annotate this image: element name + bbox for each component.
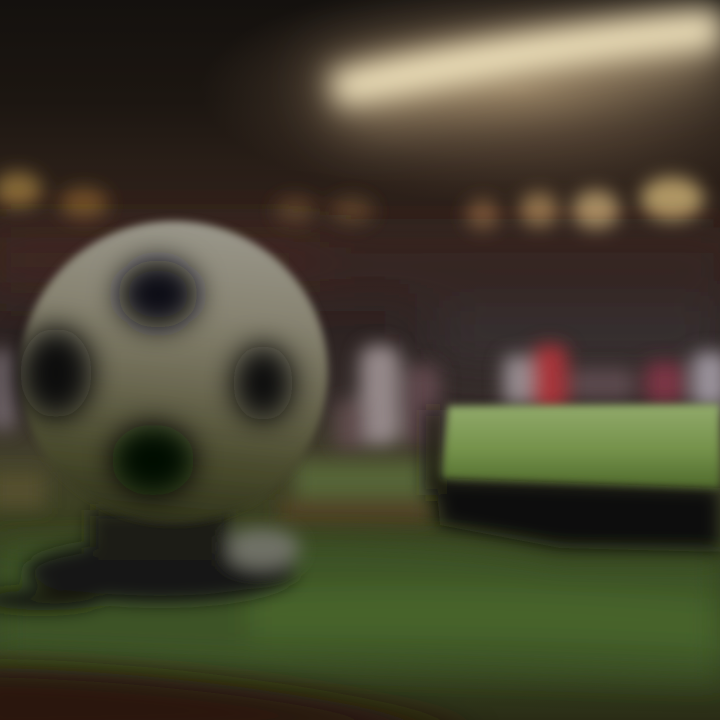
ball patches — [20, 260, 293, 496]
monitor dark base — [425, 410, 720, 552]
ball pedestal — [0, 510, 300, 610]
stand colour bands — [0, 235, 720, 350]
stadium glow under floodlight — [200, 0, 720, 205]
floodlight halo — [320, 10, 720, 125]
floodlight beam — [328, 10, 720, 106]
monitor screen — [425, 404, 720, 552]
soccer ball — [20, 221, 328, 523]
background players — [0, 345, 720, 450]
stand lights row — [0, 172, 704, 231]
mid-pitch strips — [0, 462, 430, 522]
ball body — [20, 221, 328, 523]
foreground pitch — [0, 539, 720, 680]
foreground brown edge — [0, 668, 480, 720]
monitor pitch image — [442, 404, 720, 488]
